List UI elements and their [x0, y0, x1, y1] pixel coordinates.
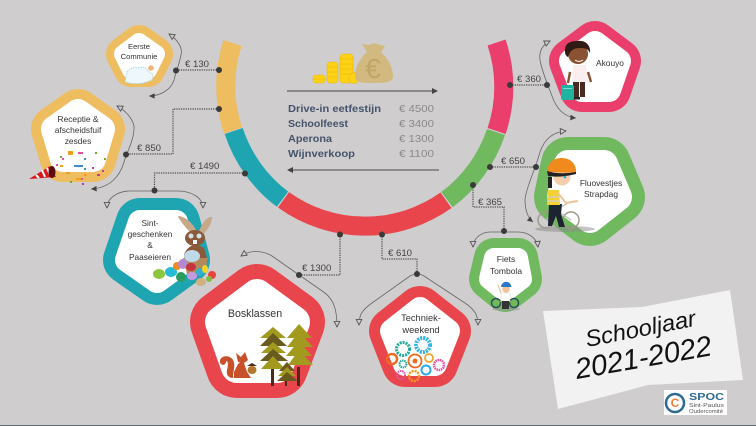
heading: Receptie: Receptie & [58, 114, 99, 124]
panel: Techniek-weekend [387, 309, 448, 381]
connector: Fluovestjes: € 650 [501, 156, 525, 167]
heading: Akouyo: Akouyo [596, 58, 624, 68]
panel: Sint-geschenken & Paaseieren [127, 216, 216, 286]
heading: Eerste Communie: Communie [121, 52, 157, 61]
logo: SPOC Sint-Paulus Oudercomité: Oudercomité [689, 409, 723, 415]
income rows: Aperona [288, 133, 332, 145]
connector: Eerste Communie: € 130 [185, 59, 209, 70]
heading: Fiets Tombola: Tombola [490, 266, 522, 276]
connector: Receptie [91, 106, 222, 189]
heading: Receptie: zesdes [65, 136, 91, 146]
panel: Bosklassen [220, 295, 313, 386]
income rows: € 3400 [399, 118, 434, 130]
heading: Eerste Communie: Eerste [128, 42, 150, 51]
arrow: top [287, 88, 438, 94]
heading: Techniek-weekend: weekend [401, 325, 440, 335]
panel: Fiets Tombola [489, 254, 522, 311]
logo: SPOC Sint-Paulus Oudercomité: SPOC [689, 391, 724, 403]
connector: Akouyo [507, 41, 576, 118]
icon: pine trees [260, 324, 313, 386]
heading: Techniek-weekend: Techniek- [401, 313, 441, 323]
donut ring of budget categories [226, 42, 504, 226]
arrow: bottom [287, 167, 439, 173]
connector: Fiets Tombola [470, 182, 538, 247]
connector: Bosklassen [241, 232, 343, 327]
heading: Fluovestjes Strapdag: Fluovestjes [580, 178, 622, 188]
title: Schooljaar 2021-2022 [572, 305, 714, 386]
title: Schooljaar 2021-2022: 2021-2022 [572, 330, 714, 386]
connector: Sint: € 1490 [190, 161, 219, 172]
panel: Schooljaar note [543, 290, 743, 409]
connector: Sint [107, 161, 248, 208]
connector: Bosklassen: € 1300 [302, 263, 331, 274]
income rows: € 1100 [399, 148, 434, 160]
panel: Akouyo [561, 41, 624, 100]
connector: Receptie: € 850 [137, 143, 161, 154]
heading: Sint: & [147, 240, 153, 250]
income rows [288, 103, 434, 160]
connector: Techniek: € 610 [388, 248, 412, 259]
income rows: € 4500 [399, 103, 434, 115]
heading: Sint: Paaseieren [129, 252, 171, 262]
icon: communion cloud and balloon [125, 65, 154, 84]
icon: child with schoolbag [561, 41, 591, 100]
icon: colourful gears [387, 338, 444, 381]
icon: boy on bike [492, 282, 520, 311]
logo: SPOC Sint-Paulus Oudercomité: Sint-Paulus [689, 403, 724, 409]
heading: Fluovestjes Strapdag: Strapdag [584, 189, 618, 199]
heading: Receptie: afscheidsfuif [55, 125, 102, 135]
icon: squirrel [220, 352, 257, 378]
logo: SPOC Sint-Paulus Oudercomité [664, 390, 727, 415]
panel: Receptie & afscheidsfuif zesdes [29, 112, 106, 185]
connector: Techniek [359, 232, 478, 325]
icon: boy on bicycle with helmet [535, 158, 595, 232]
income rows: € 1300 [399, 133, 434, 145]
panel: Eerste Communie [121, 42, 157, 84]
icon: money bag: € [365, 53, 381, 84]
panel: Fluovestjes Strapdag [535, 158, 622, 232]
income rows: Drive-in eetfestijn [288, 103, 381, 115]
icon: party popper and confetti [29, 151, 106, 185]
connector: Eerste Communie [149, 34, 222, 96]
connector: Fluovestjes [487, 131, 566, 222]
icon: easter bunny and eggs [153, 216, 216, 286]
heading: Sint: geschenken [128, 229, 173, 239]
logo: SPOC Sint-Paulus Oudercomité: C [671, 396, 680, 410]
income rows: Schoolfeest [288, 118, 349, 130]
income rows: Wijnverkoop [288, 148, 355, 160]
central income list [287, 43, 439, 173]
heading: Sint: Sint- [141, 218, 159, 228]
heading: Fiets Tombola: Fiets [497, 254, 515, 264]
title: Schooljaar 2021-2022: Schooljaar [583, 305, 699, 352]
heading: Bosklassen: Bosklassen [228, 308, 282, 320]
connector: Akouyo: € 360 [517, 74, 541, 85]
connector: Fiets Tombola: € 365 [478, 197, 502, 208]
icon: money bag [355, 43, 393, 84]
icon: coins [313, 54, 360, 84]
